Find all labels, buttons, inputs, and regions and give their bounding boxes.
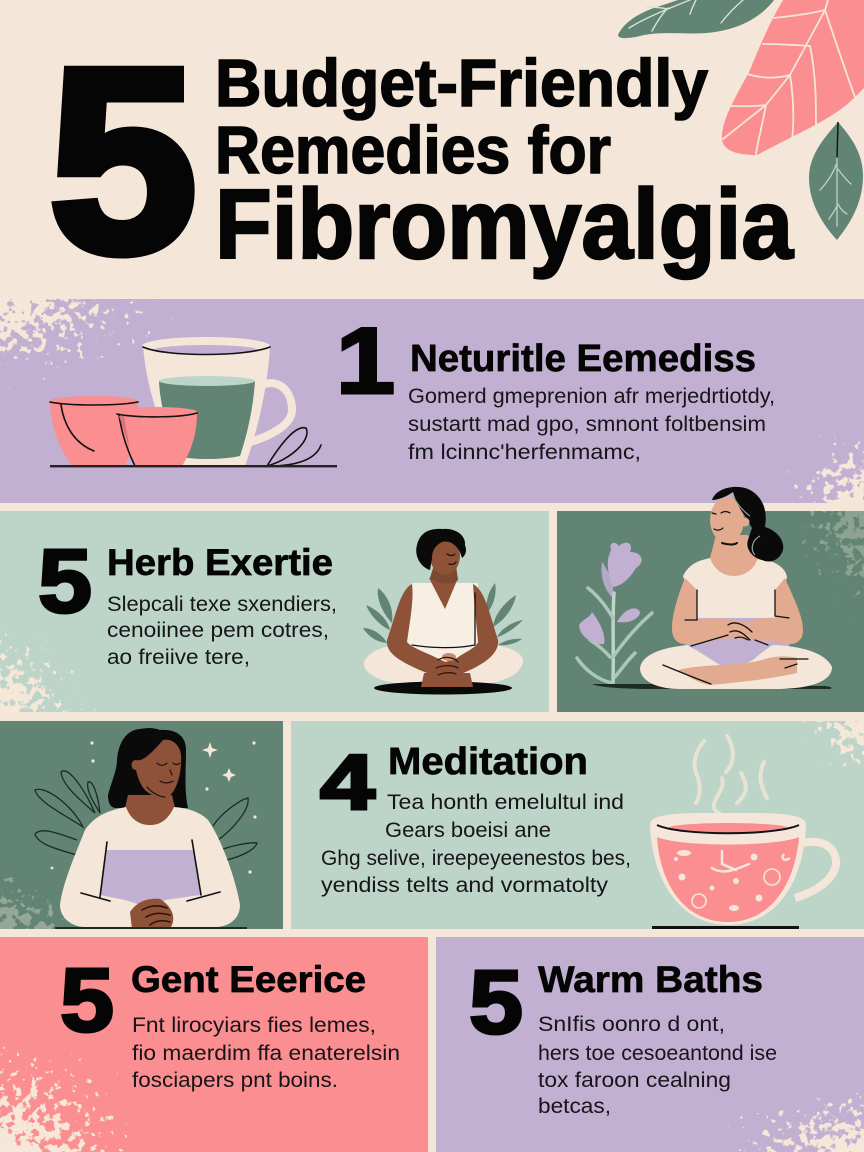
figure: meditating woman [363,529,523,694]
panel: remedy 3 meditation [291,721,864,929]
body text: remedy 2: cenoiinee pem cotres, [107,619,329,642]
numeral 5: 5 [38,532,92,632]
outlined leaves [35,771,257,860]
panel: remedy 2 illustration [557,487,864,712]
body text: warm baths: betcas, [538,1095,611,1118]
icon: small green leaf [809,122,863,240]
heading: remedy 1: Neturitle Eemediss [410,338,756,380]
numeral 5: 5 [469,953,523,1053]
heading: meditation: Meditation [388,741,588,783]
icon: tea cup with steam [650,736,836,929]
sparkle stars [51,741,257,874]
icon: mug and bowls [50,337,337,467]
body text: remedy 1 [408,385,775,464]
body text: warm baths: hers toe cesoeantond ise [538,1042,777,1065]
body text: meditation [321,791,631,897]
panel: remedy 4 illustration [0,721,283,929]
icon: coral leaf [722,0,864,155]
title line 1: Budget-Friendly [215,46,708,121]
panel: remedy 1 [0,299,864,503]
body text: remedy 2 [107,593,337,669]
body text: gentle exercise: fio maerdim ffa enaterelsin [132,1042,400,1065]
body text: meditation: Gears boeisi ane [385,819,551,842]
body text: remedy 1: sustartt mad gpo, smnont foltbensim [408,413,766,436]
body text: meditation: Tea honth emelultul ind [387,791,624,814]
decorative leaves [618,0,864,240]
body text: remedy 1: fm lcinnc'herfenmamc, [408,441,641,464]
body text: gentle exercise: fosciapers pnt boins. [132,1069,338,1092]
body text: meditation: Ghg selive, ireepeyeenestos bes, [321,847,631,870]
heading: gentle exercise: Gent Eeerice [131,959,366,1000]
title line 2: Remedies for [215,113,611,188]
body text: gentle exercise: Fnt lirocyiars fies lemes, [132,1014,376,1037]
heading: remedy 2: Herb Exertie [107,542,333,583]
panel: remedy 6 warm baths [436,937,864,1152]
panel: remedy 2 text and figure [0,511,549,712]
body text: remedy 1: Gomerd gmeprenion afr merjedrtiotdy, [408,385,775,408]
icon: green leaf top [618,0,774,38]
body text: meditation: yendiss telts and vormatolty [321,874,609,897]
body text: warm baths: tox faroon cealning [538,1069,731,1092]
figure: woman with closed eyes [60,728,240,929]
numeral 1: 1 [336,308,395,413]
body text: gentle exercise [132,1014,400,1092]
body text: warm baths [538,1013,777,1118]
numeral 4: 4 [320,738,375,826]
shadow line [592,684,832,689]
panel: remedy 5 gentle exercise [0,937,428,1152]
title line 3: Fibromyalgia [215,169,794,279]
numeral 5: 5 [60,951,114,1051]
heading: warm baths: Warm Baths [538,959,763,1000]
title [49,14,794,307]
figure: seated woman [640,487,832,689]
icon: lavender plant [577,543,652,683]
body text: warm baths: SnIfis oonro d ont, [538,1013,725,1036]
body text: remedy 2: Slepcali texe sxendiers, [107,593,337,616]
big numeral 5: 5 [49,14,197,307]
body text: remedy 2: ao freiive tere, [107,646,250,669]
